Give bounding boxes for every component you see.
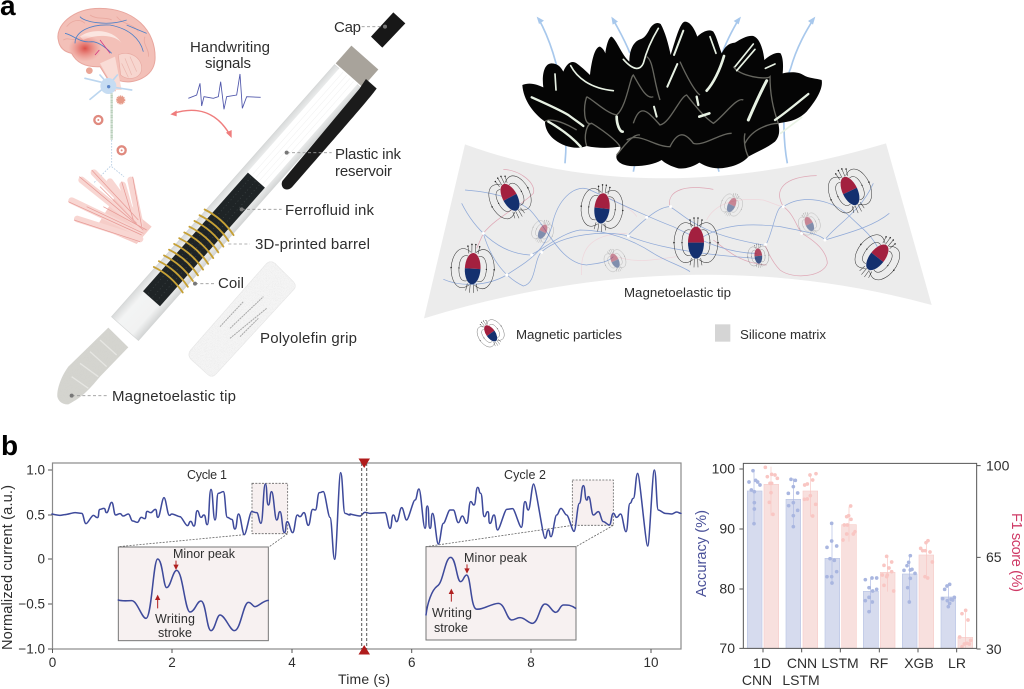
signal trace, cycle 2 — [350, 470, 681, 546]
label: Handwriting: Handwriting — [190, 39, 270, 56]
small particle, dark — [746, 243, 770, 269]
F1 tick labels: 100 — [986, 458, 1010, 474]
x tick labels — [49, 655, 659, 670]
illustration: pen — [57, 12, 405, 404]
label: Magnetoelastic tip: Magnetoelastic tip — [624, 285, 731, 300]
x axis title: Time (s) — [338, 671, 390, 687]
panel label b: b — [1, 430, 18, 461]
category labels: 1D — [753, 655, 771, 671]
x tick labels: 4 — [288, 655, 296, 670]
legend: magnetic particle — [471, 314, 510, 353]
F1 tick labels: 30 — [986, 641, 1002, 657]
F1 tick labels — [986, 458, 1010, 657]
label: Ferrofluid ink: Ferrofluid ink — [285, 202, 374, 219]
leader dots — [70, 25, 387, 398]
legend: silicone swatch — [715, 324, 730, 342]
inset 1 — [118, 547, 268, 641]
clip — [276, 79, 378, 192]
category labels: LSTM — [782, 672, 820, 688]
accuracy points — [747, 469, 956, 613]
highlight boxes and zoom connectors — [118, 480, 613, 547]
accuracy tick labels: 80 — [719, 580, 735, 596]
polymer fibers — [443, 169, 889, 286]
y tick labels — [18, 462, 45, 656]
legend label: Magnetic particles: Magnetic particles — [516, 327, 622, 342]
bar chart: model comparison — [694, 458, 1024, 688]
axis ticks — [48, 470, 651, 653]
y tick labels: 0 — [37, 552, 45, 566]
label: signals: signals — [205, 55, 251, 72]
category labels: XGB — [904, 655, 934, 671]
barrel — [112, 65, 362, 341]
F1 tick labels: 65 — [986, 549, 1002, 565]
illustration: ferrofluid and magnetoelastic tip — [424, 17, 932, 353]
fiber junctions — [482, 205, 826, 276]
label: Coil: Coil — [218, 275, 244, 292]
signal trace, cycle 1 — [52, 473, 350, 559]
y tick labels: 0.5 — [26, 508, 45, 522]
accuracy tick labels — [712, 460, 735, 656]
label: Cap: Cap — [334, 19, 361, 36]
x tick labels: 10 — [643, 655, 659, 670]
label: Magnetoelastic tip: Magnetoelastic tip — [112, 388, 236, 405]
accuracy tick labels: 70 — [719, 640, 735, 656]
plot frame — [52, 463, 681, 649]
label: 3D-printed barrel: 3D-printed barrel — [255, 236, 370, 253]
inset 1 label: Minor peak: Minor peak — [173, 547, 236, 561]
F1 bars — [764, 484, 973, 648]
plastic ink reservoir — [247, 67, 358, 188]
cycle separator — [358, 458, 370, 654]
left axis title: Accuracy (%) — [694, 510, 710, 597]
x tick labels: 2 — [168, 655, 176, 670]
silicone sheet — [424, 143, 932, 318]
y axis title: Normalized current (a.u.) — [0, 485, 16, 650]
label: Polyolefin grip: Polyolefin grip — [260, 330, 357, 347]
inset 2 label: Writing: Writing — [432, 606, 472, 620]
icon: hand muscles — [68, 170, 152, 244]
magnetic particles, small — [528, 189, 824, 276]
label: Plastic ink: Plastic ink — [335, 146, 402, 163]
legend label: Silicone matrix: Silicone matrix — [740, 327, 826, 342]
accuracy tick labels: 100 — [712, 460, 735, 476]
leader lines — [72, 27, 385, 396]
blue field arrows — [537, 17, 815, 172]
pen body — [111, 45, 388, 349]
y tick labels: −1.0 — [18, 642, 45, 656]
handwriting signal trace — [188, 74, 261, 109]
magnetoelastic tip — [57, 328, 128, 404]
label: Cycle 1: Cycle 1 — [187, 468, 227, 482]
error bars — [754, 467, 965, 648]
right axis title: F1 score (%) — [1008, 513, 1024, 592]
x tick labels: 8 — [527, 655, 535, 670]
collar — [336, 46, 378, 87]
inset 2 label: Minor peak: Minor peak — [464, 551, 528, 565]
ferrofluid spikes — [522, 22, 822, 169]
coil — [154, 208, 235, 293]
category labels: CNN — [742, 672, 772, 688]
inset 2 label: stroke: stroke — [434, 621, 468, 635]
inset 1 label: Writing: Writing — [155, 612, 195, 626]
accuracy tick labels: 90 — [719, 520, 735, 536]
polyolefin grip — [189, 262, 295, 376]
ferrofluid ink — [143, 173, 265, 306]
cap — [371, 12, 405, 48]
accuracy bars — [747, 491, 956, 648]
category labels: CNN — [787, 655, 817, 671]
category labels — [742, 655, 966, 688]
arrow: signal direction — [170, 110, 232, 138]
x tick labels: 0 — [49, 655, 56, 670]
inset 2 — [426, 547, 576, 640]
inset 1 label: stroke: stroke — [158, 626, 192, 640]
F1 points — [763, 465, 972, 648]
y tick labels: 1.0 — [26, 462, 45, 478]
y tick labels: −0.5 — [18, 596, 45, 612]
icon: myelin rings — [86, 67, 126, 154]
magnetic particles, large — [449, 160, 909, 294]
category labels: RF — [870, 655, 888, 671]
x tick labels: 6 — [408, 655, 415, 670]
label: reservoir: reservoir — [335, 163, 392, 180]
icon: brain — [58, 8, 155, 91]
label: Cycle 2: Cycle 2 — [504, 468, 546, 482]
chart axes — [739, 463, 981, 652]
line chart: normalized current — [0, 458, 681, 687]
category labels: LSTM — [821, 655, 859, 671]
illustration: brain, neuron and hand — [58, 8, 261, 244]
category labels: LR — [948, 655, 966, 671]
icon: neuron — [85, 75, 132, 183]
